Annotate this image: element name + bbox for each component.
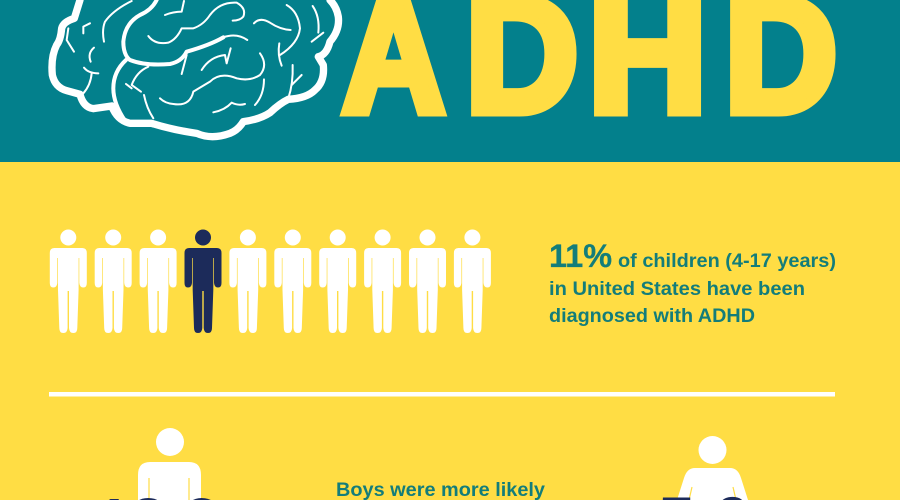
statistic text: 11% of children	[549, 238, 836, 327]
statistic text: 11% of children: of children (4-17 years)	[618, 251, 836, 272]
title	[342, 0, 837, 146]
header band	[0, 0, 900, 162]
statistic text: 11% of children: diagnosed with ADHD	[549, 306, 755, 327]
icon: boy	[138, 428, 201, 500]
divider	[49, 392, 835, 396]
icon: girl	[677, 436, 748, 500]
icon: brain	[52, 0, 339, 137]
pictogram row: 1 in 10 children	[50, 230, 491, 333]
statistic text: 11% of children: in United States have been	[549, 279, 805, 300]
statistic text: 11% of children: 11%	[549, 238, 612, 274]
